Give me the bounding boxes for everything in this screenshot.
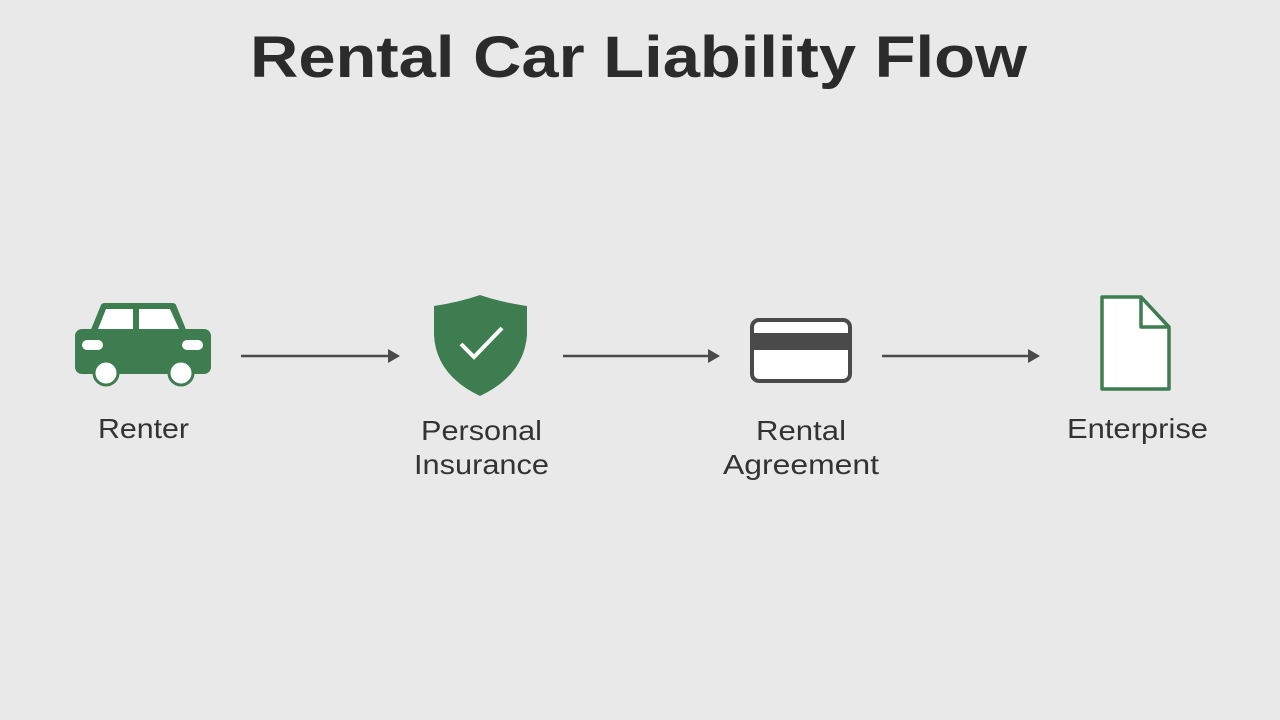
label: personal insurance <box>414 415 549 480</box>
icon: credit card <box>752 320 850 381</box>
arrow 1 <box>241 349 400 363</box>
label: rental agreement: Agreement <box>723 449 879 480</box>
label: rental agreement: Rental <box>756 415 846 446</box>
arrow 2 <box>563 349 720 363</box>
label: rental agreement <box>723 415 879 480</box>
label: personal insurance: Insurance <box>414 449 549 480</box>
icon: shield <box>434 295 527 396</box>
arrow 3 <box>882 349 1040 363</box>
title: Rental Car Liability Flow <box>250 25 1028 90</box>
label: enterprise: Enterprise <box>1067 413 1208 444</box>
icon: document <box>1102 297 1169 389</box>
label: personal insurance: Personal <box>421 415 542 446</box>
icon: car <box>75 303 211 385</box>
label: renter: Renter <box>98 413 189 444</box>
